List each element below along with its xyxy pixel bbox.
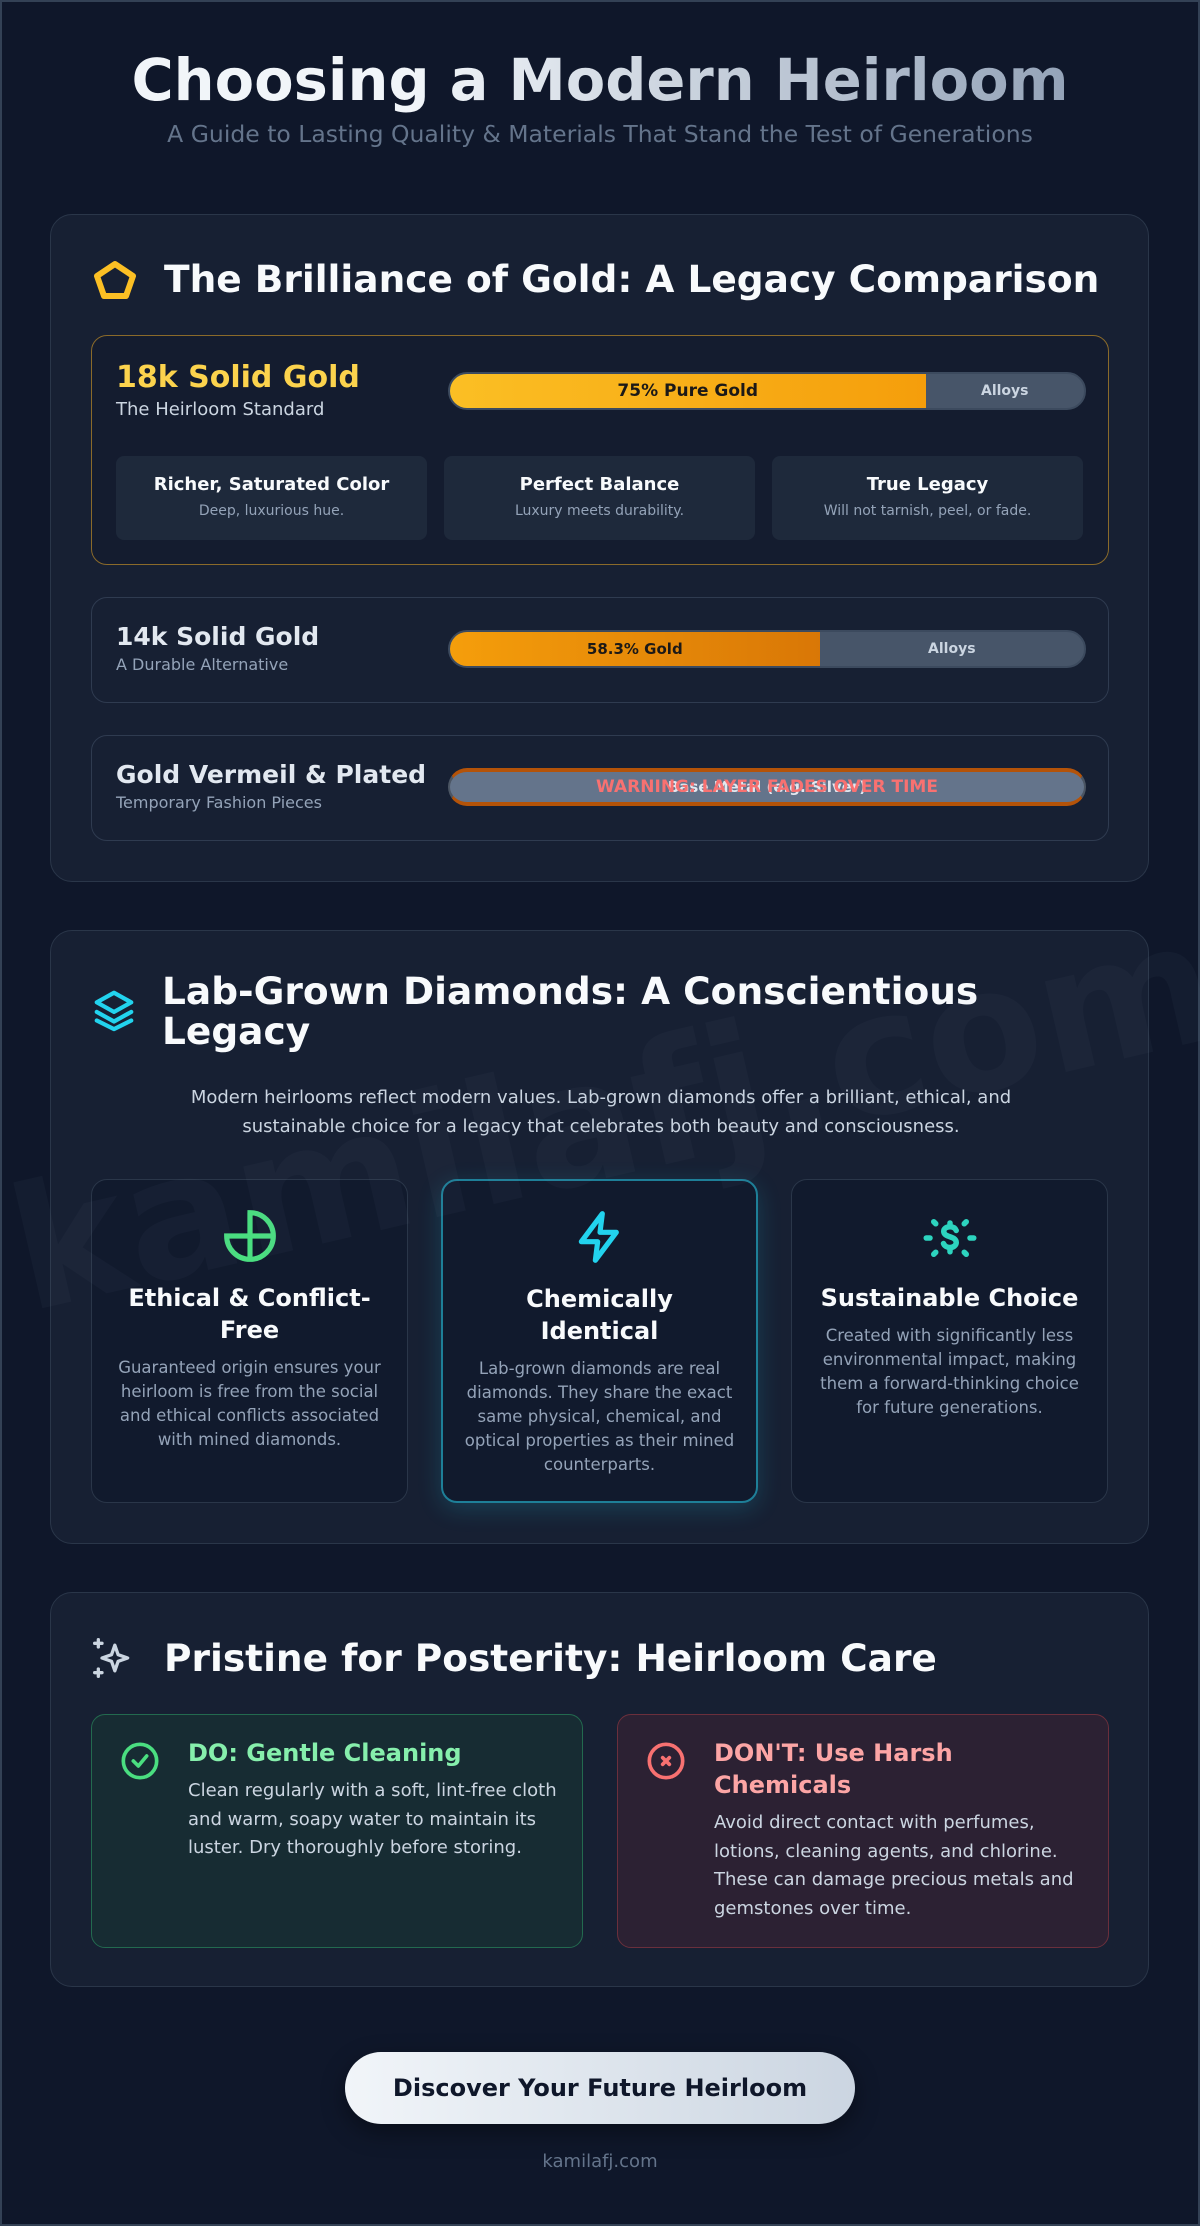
14k title (116, 622, 319, 674)
feature: color (116, 456, 427, 540)
card: sustainable: Created with significantly less environmental impact, making them a forward-thinking choice for future generations. (820, 1326, 1079, 1417)
subtitle: A Guide to Lasting Quality & Materials That Stand the Test of Generations (167, 120, 1033, 148)
dont text (714, 1739, 1074, 1918)
feature: legacy: True Legacy (867, 474, 988, 495)
icon: x (648, 1742, 684, 1780)
heading: diamonds: Lab-Grown Diamonds: A Conscientious Legacy (162, 969, 978, 1053)
title: Choosing a Modern Heirloom (131, 47, 1068, 114)
icon: bolt (578, 1211, 619, 1263)
bar: plated (448, 768, 1086, 806)
icon: check (122, 1742, 158, 1780)
dont text: DON'T: Use Harsh Chemicals (714, 1739, 953, 1799)
footer: kamilafj.com (542, 2151, 658, 2172)
18k title: 18k Solid Gold (116, 360, 360, 395)
card: ethical: Guaranteed origin ensures your heirloom is free from the social and ethical conflicts associated with mined diamonds. (118, 1358, 381, 1449)
button: cta (345, 2052, 855, 2124)
icon: sparkles (93, 1638, 130, 1678)
bar: 58.3%: Alloys (928, 641, 976, 657)
18k title: The Heirloom Standard (116, 399, 324, 420)
vermeil title: Gold Vermeil & Plated (116, 760, 426, 789)
intro text: Modern heirlooms reflect modern values. Lab-grown diamonds offer a brilliant, ethical, and sustainable choice for a legacy that celebrates both beauty and consciousness. (191, 1087, 1011, 1137)
feature: color: Richer, Saturated Color (154, 474, 389, 495)
card: dont (617, 1714, 1109, 1948)
card: chemically identical (441, 1179, 758, 1503)
feature: color: Deep, luxurious hue. (199, 503, 344, 519)
14k title: 14k Solid Gold (116, 622, 319, 651)
bar: plated: WARNING: LAYER FADES OVER TIME (596, 777, 938, 797)
bar: 75%: Alloys (981, 383, 1028, 399)
card: do (91, 1714, 583, 1948)
do text: Clean regularly with a soft, lint-free cloth and warm, soapy water to maintain its luster. Dry thoroughly before storing. (188, 1780, 557, 1858)
18k title (116, 360, 360, 420)
heading: care: Pristine for Posterity: Heirloom Care (164, 1636, 937, 1680)
feature: balance (444, 456, 755, 540)
card: chemically identical: Lab-grown diamonds are real diamonds. They share the exact same physical, chemical, and optical properties as their mined counterparts. (465, 1359, 734, 1474)
feature: balance: Luxury meets durability. (515, 503, 684, 519)
dont text: Avoid direct contact with perfumes, lotions, cleaning agents, and chlorine. These can damage precious metals and gemstones over time. (714, 1812, 1074, 1918)
heading: gold: The Brilliance of Gold: A Legacy Comparison (164, 257, 1099, 301)
bar: 58.3%: 58.3% Gold (587, 640, 683, 658)
icon: dollar sun (924, 1219, 976, 1257)
vermeil title: Temporary Fashion Pieces (116, 793, 322, 812)
card: sustainable: Sustainable Choice (821, 1284, 1078, 1312)
card: 14k (91, 597, 1109, 703)
icon: globe (224, 1210, 276, 1262)
feature: balance: Perfect Balance (520, 474, 679, 495)
card: vermeil (91, 735, 1109, 841)
bar: 75% (448, 372, 1086, 410)
panel: care (50, 1592, 1149, 1987)
card: chemically identical: Chemically Identical (526, 1285, 673, 1345)
card: ethical: Ethical & Conflict-Free (128, 1284, 371, 1344)
card: 18k (91, 335, 1109, 565)
feature: legacy (772, 456, 1083, 540)
do text: DO: Gentle Cleaning (188, 1739, 462, 1767)
button: cta: Discover Your Future Heirloom (393, 2074, 807, 2102)
panel: gold comparison (50, 214, 1149, 882)
bar: 75%: 75% Pure Gold (617, 381, 758, 401)
panel: lab-grown diamonds (50, 930, 1149, 1544)
vermeil title (116, 760, 426, 812)
card: sustainable (791, 1179, 1108, 1503)
icon: pentagon (94, 261, 136, 299)
bar: plated: Base Metal (e.g. Silver) (668, 778, 866, 796)
bar: 58.3% (448, 630, 1086, 668)
do text (188, 1739, 557, 1858)
icon: layers (94, 990, 134, 1032)
card: ethical (91, 1179, 408, 1503)
14k title: A Durable Alternative (116, 655, 288, 674)
feature: legacy: Will not tarnish, peel, or fade. (824, 503, 1031, 519)
